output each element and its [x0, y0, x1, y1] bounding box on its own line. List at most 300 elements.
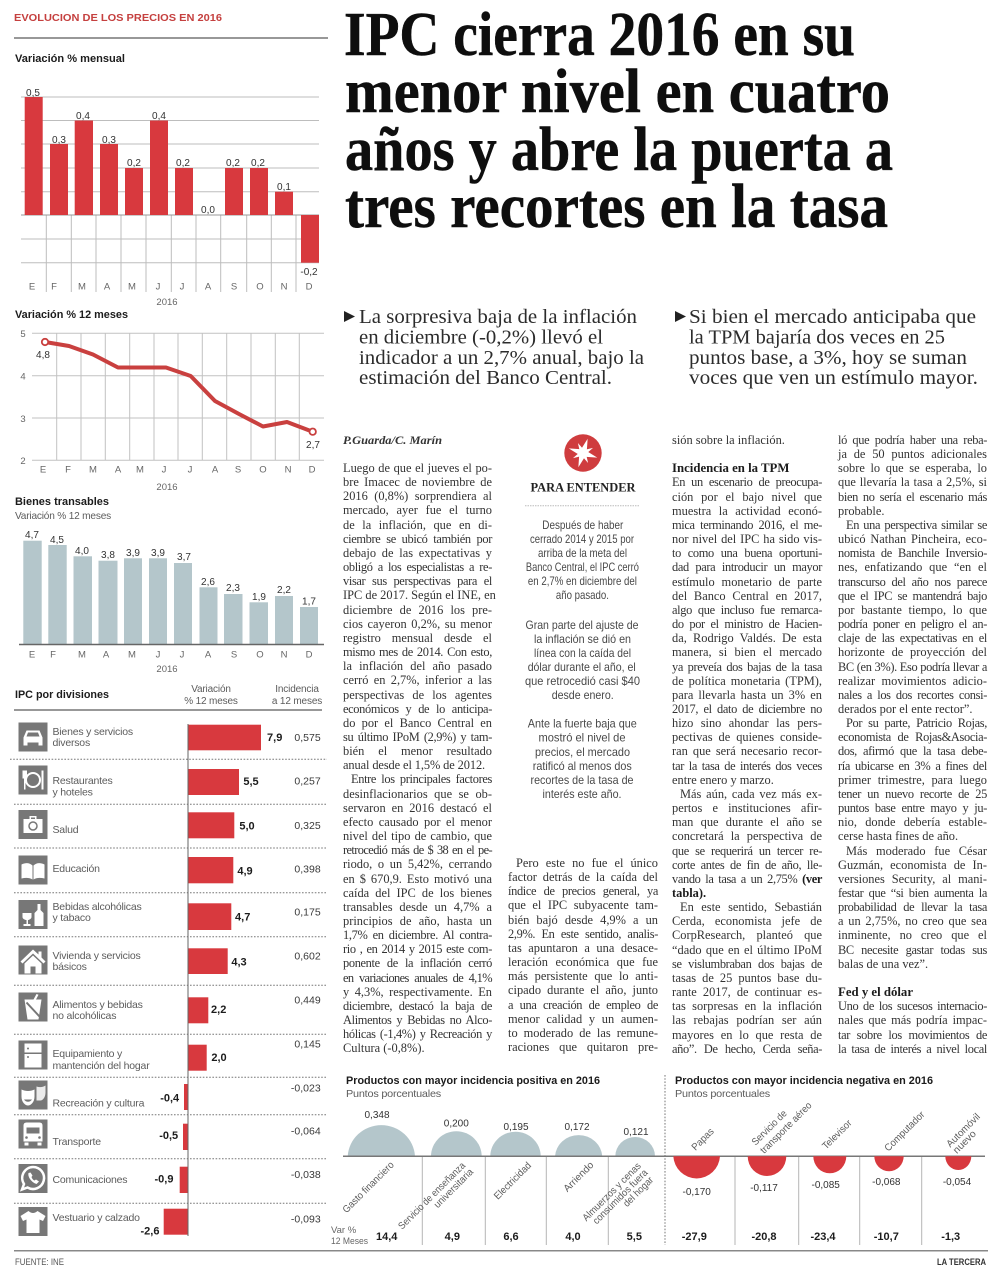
article column 4: ló que podría haber una reba-: [838, 433, 987, 447]
article column 3: pectivas de quienes conside-: [672, 730, 822, 744]
article column 1: Alimentos y Bebidas no Alco-: [343, 1013, 492, 1027]
panel: para entender: Después de haber: [542, 518, 623, 532]
chart: variación 12 meses line chart: J: [162, 464, 167, 476]
divisions labels: Recreación y cultura: [52, 1098, 145, 1110]
icon: house: [18, 946, 48, 974]
chart: productos incidencia negativa: Productos con mayor incidencia negativa en 2016: [675, 1075, 933, 1087]
divisions incidence: 0,449: [294, 994, 321, 1006]
chart: productos incidencia negativa: -0,085: [812, 1180, 840, 1191]
divisions values: 2,2: [211, 1004, 226, 1016]
article column 1: principios de año, hasta un: [343, 914, 492, 928]
article column 3: de política monetaria (TPM),: [672, 674, 822, 688]
article column 3: entre enero y marzo.: [672, 773, 774, 787]
rotated product labels: Gasto financiero: [341, 1160, 397, 1216]
article column 1: ciembre se ubicó también por: [343, 532, 492, 546]
chart: variación 12 meses line chart: 4,8: [36, 350, 50, 361]
chart: variación mensual bar chart: 0,0: [201, 205, 215, 216]
article column 1: IPC de 2017. Según el INE, en: [343, 588, 496, 602]
headline: [344, 1, 893, 241]
chart: bienes transables bar chart: 4,7: [25, 530, 39, 541]
article column 4: Por su parte, Patricio Rojas,: [846, 716, 987, 730]
chart: bienes transables bar chart: 3,8: [101, 550, 115, 561]
rotated product labels: [341, 1160, 656, 1232]
article column 4: nio, donde debería estable-: [838, 815, 987, 829]
chart: productos incidencia positiva: 0,121: [623, 1127, 649, 1138]
article column 2: tas apuntaron a una desace-: [508, 941, 658, 955]
chart: variación mensual bar chart: J: [156, 282, 161, 292]
chart: variación mensual bar chart: 0,4: [76, 111, 90, 122]
divisions incidence: 0,257: [294, 776, 321, 788]
article column 1: en $ 670,9. Esto motivó una: [343, 872, 492, 886]
article column 4: a un 2,75%, no creo que sea: [838, 914, 987, 928]
rotated product labels: del hogar: [621, 1174, 656, 1210]
divisions labels: Educación: [52, 863, 100, 875]
chart: variación 12 meses line chart: A: [115, 464, 122, 476]
article column 4: la tasa de interés a nivel local: [838, 1042, 987, 1056]
chart: IPC por divisiones table: % 12 meses: [184, 696, 238, 707]
chart: bienes transables bar chart: 2,3: [226, 583, 240, 594]
article column 1: obligó a los especialistas a re-: [343, 560, 492, 574]
article column 4: ubicó Nathan Pincheira, eco-: [838, 532, 987, 546]
chart: productos incidencia negativa: nuevo: [951, 1128, 979, 1156]
source line: LA TERCERA: [937, 1257, 986, 1268]
headline: años y abre la puerta a: [345, 116, 893, 184]
article column 4: primer trimestre, para luego: [838, 773, 987, 787]
chart: variación 12 meses line chart: N: [285, 464, 292, 476]
article column 2: Pero este no fue el único: [516, 856, 658, 870]
chart: variación 12 meses line chart: F: [65, 464, 71, 476]
chart: variación mensual bar chart: N: [281, 282, 288, 292]
panel: para entender: precios, el mercado: [535, 745, 630, 759]
panel: para entender: Banco Central, el IPC cerró: [526, 560, 639, 574]
icon: t-shirt: [18, 1207, 48, 1236]
article column 1: servaron en 2016 destacó el: [343, 801, 492, 815]
chart: productos incidencia positiva: 14,4: [376, 1231, 398, 1243]
article column 3: En un escenario de preocupa-: [672, 475, 822, 489]
article column 3: concretará la perspectiva de: [672, 829, 822, 843]
chart: variación 12 meses line chart: E: [40, 464, 46, 476]
article column 3: hizo sino ahondar las pers-: [672, 716, 822, 730]
icon: theatre masks: [18, 1080, 48, 1110]
divisions labels: Alimentos y bebidas: [52, 999, 143, 1011]
chart: productos incidencia negativa: -20,8: [751, 1231, 777, 1243]
chart: bienes transables bar chart: J: [156, 650, 161, 660]
article column 1: 2016 (0,8%) sorprendiera al: [343, 489, 492, 503]
article column 3: manera, si bien el mercado: [672, 645, 822, 659]
article column 4: que llevaría la tasa a 2,5%, si: [838, 475, 987, 489]
article column 1: [343, 461, 496, 1055]
article column 3: algo que incluso fue remarca-: [672, 603, 822, 617]
article column 1: caída del IPC de los bienes: [343, 886, 492, 900]
article column 2: raciones que quitaron pre-: [508, 1040, 658, 1054]
deck: left bullet: La sorpresiva baja de la inflación: [359, 306, 637, 328]
chart: bienes transables bar chart: 4,0: [75, 546, 89, 557]
chart: variación 12 meses line chart: M: [89, 464, 97, 476]
deck: right bullet: voces que ven un estímulo mayor.: [689, 367, 978, 389]
chart: bienes transables bar chart: N: [281, 650, 288, 660]
article column 3: En este sentido, Sebastián: [680, 900, 822, 914]
article column 1: Cultura (-0,8%).: [343, 1041, 425, 1055]
article column 3: estímulo monetario de parte: [672, 575, 822, 589]
panel: para entender: Ante la fuerte baja que: [528, 716, 637, 730]
chart: bienes transables bar chart: J: [180, 650, 185, 660]
article column 4: sobre lo que se esperaba, lo: [838, 461, 987, 475]
chart: bienes transables bar chart: 1,9: [252, 592, 266, 603]
chart: variación mensual bar chart: E: [29, 282, 35, 292]
article column 1: efecto causado por el menor: [343, 815, 492, 829]
rotated product labels: Servicio de enseñanza: [397, 1160, 468, 1232]
article column 3: “dado que en el último IPoM: [672, 943, 822, 957]
article column 3: las rebajas podrían ser aún: [672, 1013, 822, 1027]
divisions incidence: 0,398: [294, 863, 321, 875]
chart: productos incidencia negativa: -0,117: [750, 1183, 778, 1194]
article column 3: ya preveía dos bajas de la tasa: [672, 660, 822, 674]
article column 3: corte antes de fin de año, lle-: [672, 858, 822, 872]
chart: productos incidencia positiva: 0,200: [444, 1119, 469, 1130]
article column 1: la inflación del año pasado: [343, 659, 492, 673]
article column 1: do por el Banco Central en: [343, 716, 492, 730]
chart: productos incidencia negativa: [673, 1075, 983, 1245]
article column 4: podría poner en peligro el an-: [838, 617, 987, 631]
rotated product labels: universitaria: [432, 1167, 476, 1211]
article column 1: riodo, o un 5,42%, cerrando: [343, 857, 492, 871]
article column 2: más persistente que lo anti-: [508, 969, 658, 983]
divisions incidence: [291, 732, 321, 1225]
article column 4: nes, enfatizando que “en el: [838, 560, 987, 574]
article column 3: para llevarla hasta un 3% en: [672, 688, 822, 702]
icon: plate and cutlery: [18, 766, 48, 794]
divisions values: 5,5: [243, 776, 259, 788]
article column 1: cios cayeron 0,2%, su menor: [343, 617, 492, 631]
chart: variación 12 meses line chart: A: [212, 464, 219, 476]
deck: left bullet: en diciembre (-0,2%) llevó el: [359, 326, 603, 348]
chart: productos incidencia positiva: Productos con mayor incidencia positiva en 2016: [346, 1075, 600, 1087]
chart: productos incidencia positiva: 12 Meses: [331, 1236, 368, 1247]
headline: menor nivel en cuatro: [345, 58, 890, 126]
article column 4: Fed y el dólar: [838, 985, 913, 999]
chart: variación 12 meses line chart: [15, 309, 324, 493]
article column 3: tas sorpresas en la inflación: [672, 999, 822, 1013]
panel: para entender: dólar durante el año, el: [528, 660, 636, 674]
article column 1: bién el menor resultado: [343, 744, 492, 758]
article column 1: cerró en 2,7%, inferior a las: [343, 673, 492, 687]
chart: productos incidencia positiva: Var %: [331, 1225, 357, 1236]
article column 4: En una perspectiva similar se: [846, 518, 987, 532]
divisions labels: no alcohólicas: [52, 1010, 116, 1022]
icon: bus: [18, 1120, 48, 1148]
chart: variación 12 meses line chart: S: [235, 464, 241, 476]
deck: right bullet: la TPM bajaría dos veces en 25: [689, 326, 945, 348]
chart: variación 12 meses line chart: O: [259, 464, 267, 476]
divisions labels: diversos: [52, 737, 90, 749]
article column 1: y 4,3%, respectivamente. En: [343, 985, 492, 999]
article column 1: nivel del tipo de cambio, que: [343, 829, 492, 843]
article column 2: to moderado de las remune-: [508, 1026, 658, 1040]
source line: FUENTE: INE: [15, 1257, 64, 1268]
article column 1: su último IPoM (2,9%) y tam-: [343, 730, 492, 744]
chart: variación mensual bar chart: -0,2: [300, 267, 318, 278]
article column 4: versiones Security, al mani-: [838, 872, 987, 886]
chart: variación mensual bar chart: F: [51, 282, 57, 292]
divisions labels: Vestuario y calzado: [52, 1212, 140, 1224]
article column 1: hólicas (-1,4%) y Recreación y: [343, 1027, 492, 1041]
chart: productos incidencia positiva: 4,9: [445, 1231, 460, 1243]
chart: productos incidencia negativa: -0,170: [683, 1187, 711, 1198]
article column 4: inminente, no creo que el: [838, 928, 987, 942]
headline: IPC cierra 2016 en su: [344, 1, 855, 69]
chart: productos incidencia positiva: 5,5: [627, 1231, 642, 1243]
article column 1: Luego de que el jueves el po-: [343, 461, 492, 475]
chart: variación mensual bar chart: 0,5: [26, 88, 40, 99]
section heading: evolucion de los precios: EVOLUCION DE LOS PRECIOS EN 2016: [14, 12, 222, 24]
article column 4: tener un nuevo recorte de 25: [838, 787, 987, 801]
chart: productos incidencia negativa: Papas: [690, 1126, 717, 1153]
chart: bienes transables bar chart: 2,6: [201, 577, 215, 588]
chart: productos incidencia negativa: -0,068: [872, 1177, 901, 1188]
divisions incidence: -0,093: [291, 1213, 321, 1225]
article column 1: económicos y de lo anticipa-: [343, 702, 492, 716]
article column 1: perspectivas de los agentes: [343, 688, 492, 702]
article column 3: Cerda, economista jefe de: [672, 914, 822, 928]
chart: productos incidencia negativa: -27,9: [682, 1231, 707, 1243]
article column 1: rio , en 2014 y 2015 este com-: [343, 942, 492, 956]
chart: bienes transables bar chart: E: [29, 650, 35, 660]
article column 3: dad para introducir un mayor: [672, 560, 822, 574]
divisions labels: y hoteles: [52, 786, 93, 798]
article column 3: man que durante el año se: [672, 815, 822, 829]
deck: left bullet: [344, 306, 644, 389]
deck: right bullet: Si bien el mercado anticipaba que: [689, 306, 976, 328]
article column 2: menor calidad y un aumen-: [508, 1012, 658, 1026]
chart: productos incidencia negativa: Televisor: [820, 1118, 855, 1152]
chart: bienes transables bar chart: A: [103, 650, 110, 660]
divisions values: [141, 732, 282, 1237]
chart: variación mensual bar chart: 0,2: [127, 158, 141, 169]
divisions labels: Equipamiento y: [52, 1048, 123, 1060]
article column 4: ja de 50 puntos adicionales: [838, 447, 987, 461]
divisions labels: Restaurantes: [52, 775, 113, 787]
divisions labels: Bienes y servicios: [52, 726, 133, 738]
article column 3: que se requerirá un tercer re-: [672, 844, 822, 858]
article column 2: factor detrás de la caída del: [508, 870, 658, 884]
chart: productos incidencia negativa: Computador: [883, 1109, 928, 1154]
article column 1: anual desde el 1,5% de 2012.: [343, 758, 485, 772]
chart: bienes transables bar chart: 3,9: [126, 548, 140, 559]
chart: variación mensual bar chart: D: [306, 282, 313, 292]
article column 1: visar sus perspectivas para el: [343, 574, 492, 588]
panel: para entender: año pasado.: [556, 588, 609, 602]
chart: bienes transables bar chart: D: [306, 650, 313, 660]
divisions incidence: -0,064: [291, 1125, 321, 1137]
chart: IPC por divisiones table: Incidencia: [275, 684, 319, 695]
article column 2: cipado durante el año, junto: [508, 983, 658, 997]
article column 4: nales a los dos recortes consi-: [838, 688, 987, 702]
chart: productos incidencia negativa: Servicio de: [750, 1108, 790, 1148]
divisions values: -0,4: [160, 1092, 180, 1104]
chart: bienes transables bar chart: 2016: [156, 664, 178, 675]
deck: left bullet: indicador a un 2,7% anual, bajo la: [359, 347, 644, 369]
article column 4: festar que “si bien aumenta la: [838, 886, 987, 900]
article column 4: Guzmán, economista de In-: [838, 858, 987, 872]
article column 4: claje de las expectativas en el: [838, 631, 987, 645]
article column 3: pertos e instituciones afir-: [672, 801, 822, 815]
divisions values: 7,9: [267, 732, 282, 744]
divisions labels: Salud: [52, 824, 79, 836]
divisions values: 4,3: [231, 957, 247, 969]
chart: variación mensual bar chart: 0,2: [226, 158, 240, 169]
divisions incidence: 0,575: [294, 732, 321, 744]
icon: soft drink cup: [18, 992, 48, 1022]
article column 3: vando la tasa a un 2,75% (ver: [672, 872, 822, 886]
article column 3: da, Rodrigo Valdés. De esta: [672, 631, 822, 645]
chart: bienes transables bar chart: Variación % 12 meses: [15, 510, 111, 522]
panel: para entender: cerrado 2014 y 2015 por: [530, 532, 634, 546]
chart: variación 12 meses line chart: 2: [20, 456, 26, 467]
rotated product labels: Almuerzos y cenas: [581, 1161, 644, 1224]
divisions values: 2,0: [211, 1052, 227, 1064]
divisions values: -0,5: [159, 1130, 178, 1142]
chart: productos incidencia positiva: 6,6: [503, 1231, 519, 1243]
article column 2: índice de precios general, ya: [508, 884, 658, 898]
article column 4: nales que más podría impac-: [838, 1013, 987, 1027]
chart: variación mensual bar chart: 0,2: [251, 158, 265, 169]
divisions values: -0,9: [155, 1174, 173, 1186]
article column 4: puntos base entre mayo y ju-: [838, 801, 987, 815]
chart: bienes transables bar chart: 4,5: [50, 535, 64, 546]
article column 1: debajo de las expectativas y: [343, 546, 492, 560]
article column 4: que el IPC se mantendrá bajo: [838, 589, 987, 603]
article column 3: año”. De hecho, Cerda seña-: [672, 1042, 822, 1056]
article column 4: dos, afirmó que la tasa debe-: [838, 744, 987, 758]
chart: productos incidencia negativa: Puntos porcentuales: [675, 1088, 770, 1100]
article column 2: bién bajó desde 4,9% a un: [508, 913, 658, 927]
headline: tres recortes en la tasa: [345, 173, 888, 241]
article column 1: bre Imacec de noviembre de: [343, 475, 492, 489]
byline: P.Guarda/C. Marín: [343, 433, 442, 447]
chart: variación mensual bar chart: A: [104, 282, 111, 292]
article column 1: Entre los principales factores: [351, 772, 492, 786]
chart: productos incidencia positiva: 0,348: [364, 1110, 390, 1121]
article column 4: derados por el ente rector”.: [838, 702, 973, 716]
chart: variación mensual bar chart: 0,3: [52, 135, 66, 146]
chart: variación mensual bar chart: A: [205, 282, 212, 292]
panel: para entender: desde enero.: [552, 688, 614, 702]
chart: bienes transables bar chart: O: [256, 650, 264, 660]
panel: para entender: interés este año.: [542, 787, 622, 801]
article column 4: horizonte de proyección del: [838, 645, 987, 659]
article column 4: probable.: [838, 504, 884, 518]
divisions incidence: 0,145: [294, 1038, 321, 1050]
article column 4: transcurso del año nos parece: [838, 575, 987, 589]
divisions values: 4,9: [237, 865, 253, 877]
chart: variación mensual bar chart: [15, 53, 319, 308]
article column 1: 1,7% en diciembre. Al contra-: [343, 928, 492, 942]
article column 3: Más aún, cada vez más ex-: [680, 787, 822, 801]
article column 4: tar sobre los movimientos de: [838, 1028, 987, 1042]
icon: car: [18, 722, 48, 752]
article column 4: [838, 433, 988, 1056]
article column 2: a una creación de empleo de: [508, 998, 658, 1012]
article column 1: en variaciones anuales de 4,1%: [343, 971, 492, 985]
article column 1: diciembre de 2016 los pre-: [343, 603, 492, 617]
article column 4: bien no sería el escenario más: [838, 490, 987, 504]
icon: medical case: [18, 810, 48, 839]
icon: refrigerator: [18, 1040, 48, 1070]
article column 4: economista de Rojas&Asocia-: [838, 730, 987, 744]
divisions labels: Transporte: [52, 1136, 101, 1148]
panel: para entender: en 2,7% en diciembre del: [528, 574, 637, 588]
article column 1: mismo mes de 2014. Con esto,: [343, 645, 492, 659]
chart: variación mensual bar chart: J: [180, 282, 185, 292]
chart: bienes transables bar chart: [15, 496, 324, 675]
article column 3: [672, 433, 822, 1056]
divisions values: 5,0: [239, 821, 255, 833]
rotated product labels: Electricidad: [492, 1160, 534, 1202]
article column 3: muestra la actividad econó-: [672, 504, 822, 518]
article column 1: mercado, ayer fue el turno: [343, 503, 492, 517]
divisions values: -2,6: [141, 1225, 159, 1237]
article column 3: ción por el bajo nivel que: [672, 490, 822, 504]
rotated product labels: Arriendo: [562, 1160, 597, 1195]
chart: variación mensual bar chart: O: [256, 282, 264, 292]
chart: variación mensual bar chart: 0,3: [102, 135, 116, 146]
chart: bienes transables bar chart: S: [231, 650, 237, 660]
article column 3: to como una buena oportuni-: [672, 546, 822, 560]
article column 1: desinflacionarios que se ob-: [343, 787, 492, 801]
chart: bienes transables bar chart: M: [128, 650, 136, 660]
divisions labels: Vivienda y servicios: [52, 950, 141, 962]
panel: para entender: la inflación se dió en: [534, 632, 631, 646]
chart: IPC por divisiones table: Variación: [191, 684, 231, 695]
article column 4: por bastante tiempo, lo que: [838, 603, 987, 617]
chart: bienes transables bar chart: M: [78, 650, 86, 660]
panel: para entender: Gran parte del ajuste de: [526, 618, 639, 632]
article column 3: mica terminando 2016, el me-: [672, 518, 822, 532]
chart: variación mensual bar chart: M: [128, 282, 136, 292]
chart: variación 12 meses line chart: 3: [20, 414, 26, 425]
chart: productos incidencia negativa: transporte aéreo: [759, 1100, 815, 1156]
article column 4: Uno de los sucesos internacio-: [838, 999, 987, 1013]
chart: variación mensual bar chart: 0,2: [176, 158, 190, 169]
article column 3: se vislumbraban dos bajas de: [672, 957, 822, 971]
icon: wine glass and bottle: [18, 900, 48, 929]
divisions labels: mantención del hogar: [52, 1060, 150, 1072]
chart: IPC por divisiones table: [10, 684, 327, 1237]
article column 3: nor nivel del IPC ha sido vis-: [672, 532, 822, 546]
article column 3: tasas de 25 puntos base du-: [672, 971, 822, 985]
deck: left bullet: estimación del Banco Central.: [359, 367, 612, 389]
icon: open book: [18, 856, 48, 884]
divisions labels: [52, 726, 150, 1224]
article column 4: cerse hasta fines de año.: [838, 829, 958, 843]
article column 3: rante 2017, de continuar es-: [672, 985, 822, 999]
article column 2: 2,9%. En este sentido, analis-: [508, 927, 658, 941]
deck: right bullet: puntos base, a 3%, hoy se suman: [689, 347, 967, 369]
chart: productos incidencia negativa: -1,3: [941, 1231, 960, 1243]
chart: bienes transables bar chart: 1,7: [302, 596, 316, 608]
article column 4: Más moderado fue César: [846, 844, 987, 858]
panel: para entender: línea con la caída del: [534, 646, 631, 660]
panel: para entender: recortes de la tasa de: [530, 773, 634, 787]
article column 1: registro mensual desde el: [343, 631, 492, 645]
chart: productos incidencia positiva: 4,0: [565, 1231, 581, 1243]
chart: productos incidencia negativa: -23,4: [810, 1231, 836, 1243]
chart: productos incidencia negativa: Automóvil: [945, 1112, 983, 1150]
article column 1: transables desde un 4,7% a: [343, 900, 492, 914]
divisions incidence: 0,325: [294, 820, 321, 832]
chart: variación 12 meses line chart: 2016: [156, 482, 178, 493]
chart: variación mensual bar chart: 2016: [156, 297, 178, 308]
